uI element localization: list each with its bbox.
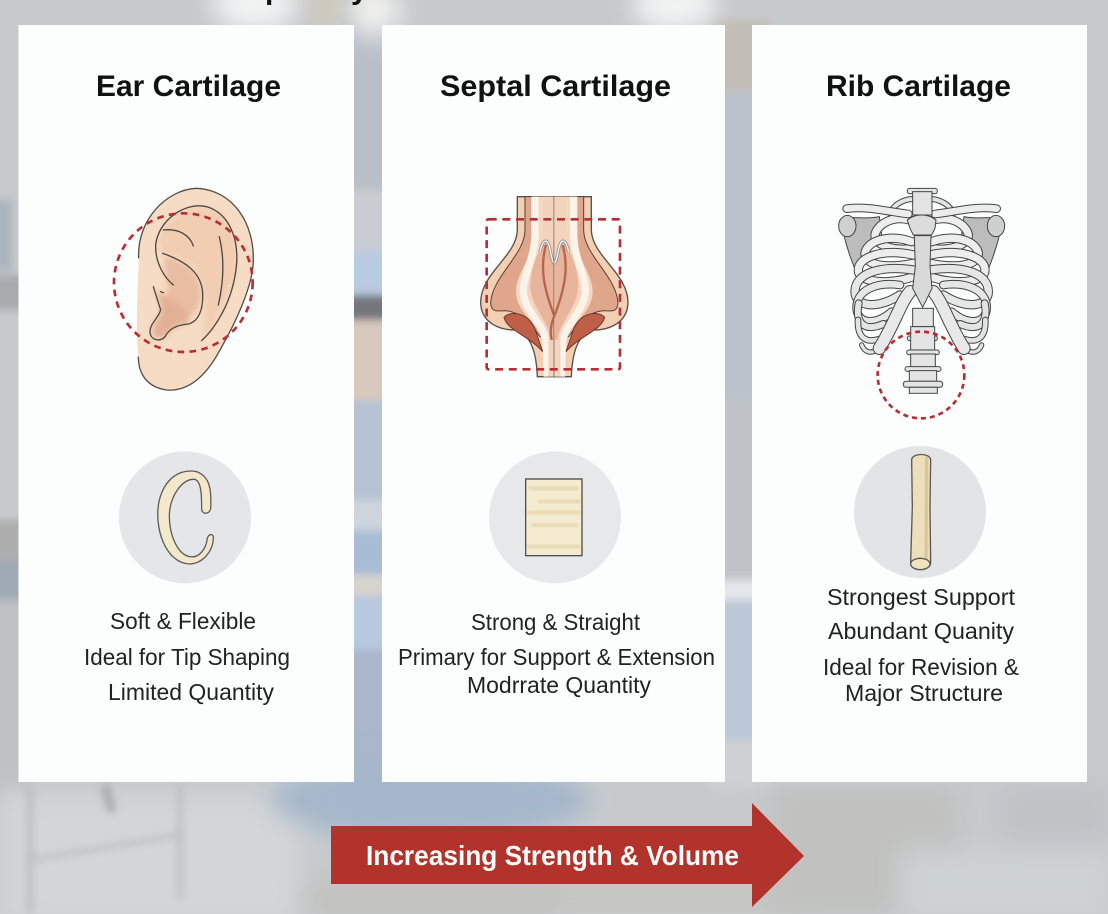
text: rib cartilage properties: Ideal for Revision & (823, 654, 1019, 680)
heading: rib cartilage: Rib Cartilage (826, 70, 1011, 103)
illustration: nose cross-section with dashed harvest box (481, 197, 628, 377)
text: rib cartilage properties: Abundant Quanity (828, 618, 1014, 644)
icon: rod-shaped rib graft (854, 446, 986, 578)
text: septal cartilage properties: Strong & Straight (471, 609, 641, 635)
illustration: ear with dashed harvest circle (114, 188, 253, 390)
text: septal cartilage properties (398, 609, 715, 698)
text: ear cartilage properties: Soft & Flexible (110, 608, 256, 634)
text: rib cartilage properties: Major Structure (845, 680, 1003, 706)
icon: rectangular septal graft (489, 451, 621, 583)
text: ear cartilage properties (84, 608, 290, 705)
arrow: increasing strength and volume: Increasing Strength & Volume (366, 840, 739, 871)
panel: septal cartilage (382, 25, 725, 782)
heading: ear cartilage: Ear Cartilage (96, 70, 281, 103)
arrow: increasing strength and volume (331, 803, 804, 907)
cropped title fragment at the top edge (265, 0, 368, 6)
icon: c-shaped ear graft (119, 451, 251, 583)
text: rib cartilage properties: Strongest Support (827, 584, 1016, 610)
text: ear cartilage properties: Ideal for Tip Shaping (84, 644, 290, 670)
panel: rib cartilage (752, 25, 1087, 782)
text: rib cartilage properties (823, 584, 1019, 706)
text: septal cartilage properties: Modrrate Quantity (467, 672, 651, 698)
illustration: rib cage with dashed harvest circle (839, 188, 1005, 418)
text: septal cartilage properties: Primary for Support & Extension (398, 644, 715, 670)
heading: septal cartilage: Septal Cartilage (440, 70, 671, 103)
text: ear cartilage properties: Limited Quantity (108, 679, 274, 705)
panel: ear cartilage (18, 25, 354, 782)
